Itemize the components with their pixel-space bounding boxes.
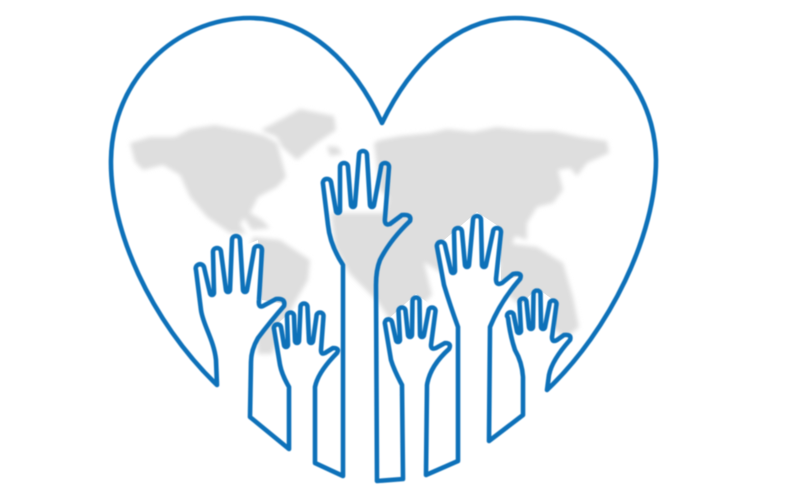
Greenland xyxy=(261,109,336,160)
North America xyxy=(130,125,286,234)
Southeast Asia and Australia xyxy=(495,243,579,338)
heart and hands continuous outline xyxy=(111,18,656,481)
white hand interiors xyxy=(195,212,572,479)
world map xyxy=(130,109,609,354)
Iceland xyxy=(327,146,342,156)
South America xyxy=(245,237,310,354)
Eurasia and Africa xyxy=(331,127,609,320)
